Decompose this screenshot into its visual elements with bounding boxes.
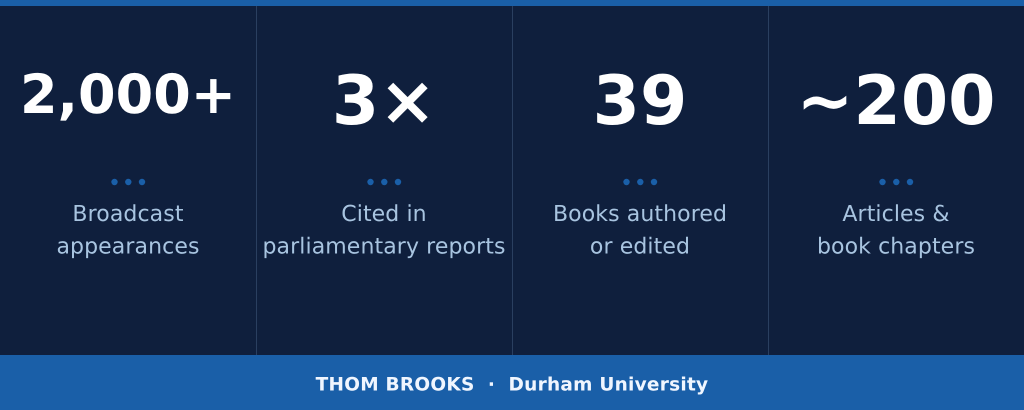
label: articles: Articles & [842,202,950,227]
footer bar [0,355,1024,410]
dots separator [623,179,657,185]
label: books: or edited [590,234,690,260]
panel: articles [797,62,995,260]
dots separator [879,179,913,185]
label: parliamentary reports: parliamentary reports [262,234,506,260]
footer text: THOM BROOKS · Durham University [316,374,708,396]
label: broadcast appearances: Broadcast [72,202,184,227]
panel: parliamentary citations [262,62,506,260]
label: articles: book chapters [817,234,975,260]
stat: 3x: 3× [332,62,436,141]
stat: 2,000+: 2,000+ [20,63,236,126]
dots separator [111,179,145,185]
top accent bar [0,0,1024,6]
panel: books [553,62,727,260]
stat: 39: 39 [593,62,687,141]
label: books: Books authored [553,202,727,227]
label: broadcast appearances: appearances [56,234,200,260]
label: parliamentary reports: Cited in [341,202,427,227]
panel: broadcast appearances [20,63,236,260]
dots separator [367,179,401,185]
stat: ~200: ~200 [797,62,995,141]
